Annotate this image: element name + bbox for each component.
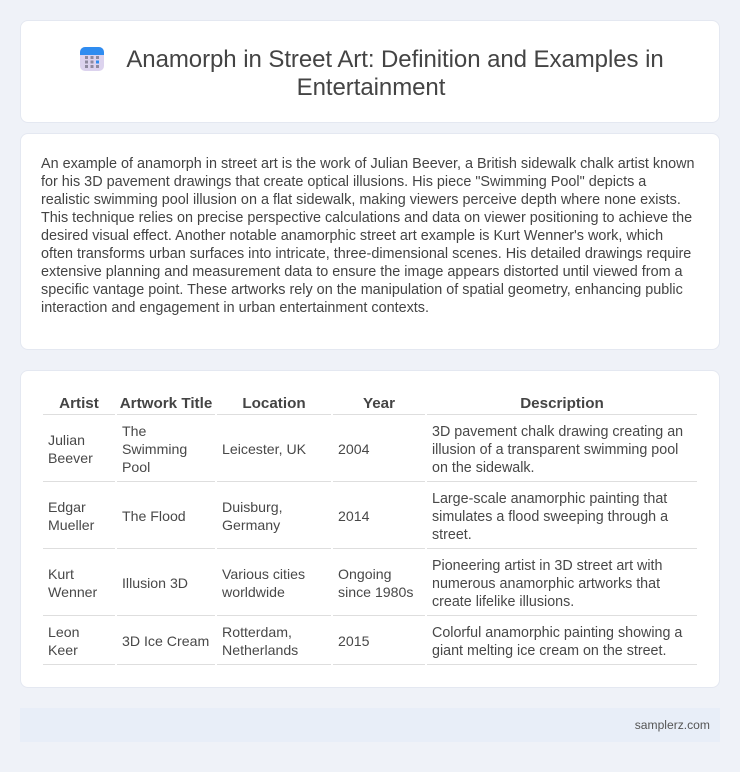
table header: Artist	[59, 395, 99, 412]
table row: Leon Keer: Keer	[48, 642, 78, 658]
table row: Edgar Mueller: street.	[432, 527, 472, 543]
table row: Leon Keer: Rotterdam,	[222, 624, 292, 640]
table row: Edgar Mueller: Germany	[222, 517, 280, 533]
table row: Leon Keer: 3D Ice Cream	[122, 633, 209, 649]
text block: intro: interaction and engagement in urban entertainment contexts.	[41, 300, 429, 316]
table row: Julian Beever: Leicester, UK	[222, 441, 306, 457]
table row: Kurt Wenner: worldwide	[222, 584, 285, 600]
table row: Kurt Wenner: numerous anamorphic artworks that	[432, 576, 660, 592]
table row: Julian Beever: 3D pavement chalk drawing creating an	[432, 424, 683, 440]
table row: Edgar Mueller: Duisburg,	[222, 499, 283, 515]
table row: Edgar Mueller: 2014	[338, 508, 369, 524]
panel: title card	[20, 20, 720, 123]
table header: Description	[520, 395, 604, 412]
table row: Kurt Wenner: since 1980s	[338, 584, 413, 600]
panel: artworks table	[20, 370, 720, 688]
table row: Kurt Wenner	[48, 558, 662, 610]
table row: Kurt Wenner: Wenner	[48, 584, 97, 600]
table row: Kurt Wenner: Pioneering artist in 3D street art with	[432, 558, 662, 574]
table row: Julian Beever: Julian	[48, 432, 85, 448]
table row: Julian Beever: Swimming	[122, 441, 187, 457]
table row: Julian Beever: Beever	[48, 450, 93, 466]
table row: Edgar Mueller	[48, 491, 668, 543]
icon: calendar	[80, 47, 104, 71]
text block: intro: extensive planning and measurement data to ensure the image appears distorted until viewed from a	[41, 264, 683, 280]
table row: Kurt Wenner: Illusion 3D	[122, 575, 188, 591]
table row: Julian Beever: 2004	[338, 441, 369, 457]
text block: intro: An example of anamorph in street art is the work of Julian Beever, a British sidewalk chalk artist known	[41, 156, 694, 172]
table row: Julian Beever	[48, 423, 683, 476]
table row: Leon Keer: Netherlands	[222, 642, 298, 658]
text block: intro: desired visual effect. Another notable anamorphic street art example is Kurt Wenner's work, which	[41, 228, 663, 244]
text block: intro: This technique relies on precise perspective calculations and data on viewer positioning to achieve the	[41, 210, 692, 226]
table row: Edgar Mueller: Mueller	[48, 517, 94, 533]
table row: Julian Beever: The	[122, 423, 146, 439]
table row: Edgar Mueller: The Flood	[122, 508, 186, 524]
table row: Edgar Mueller: Edgar	[48, 499, 86, 515]
table header: Year	[363, 395, 395, 412]
table row: Edgar Mueller: Large-scale anamorphic painting that	[432, 491, 667, 507]
text block: intro: for his 3D pavement drawings that create optical illusions. His piece "Swimming Pool" depicts a	[41, 174, 646, 190]
table row: Julian Beever: on the sidewalk.	[432, 460, 535, 476]
table row: Leon Keer: Colorful anamorphic painting showing a	[432, 625, 682, 641]
footer text: samplerz.com	[635, 718, 710, 732]
title	[126, 46, 664, 101]
table row: Kurt Wenner: Kurt	[48, 566, 74, 582]
text block: intro: realistic swimming pool illusion on a flat sidewalk, making viewers perceive depth where none exists.	[41, 192, 681, 208]
table row: Leon Keer: 2015	[338, 633, 369, 649]
table header	[59, 395, 604, 412]
table row: Kurt Wenner: Various cities	[222, 566, 305, 582]
title: Anamorph in Street Art: Definition and Examples in	[126, 46, 664, 73]
text block: intro: often transforms urban surfaces into intricate, three-dimensional scenes. His detailed drawings require	[41, 246, 691, 262]
table row: Kurt Wenner: create lifelike illusions.	[432, 594, 574, 610]
text block: intro	[41, 156, 694, 316]
table header: Artwork Title	[120, 395, 212, 412]
table row: Julian Beever: illusion of a transparent swimming pool	[432, 442, 678, 458]
title: Entertainment	[297, 74, 445, 101]
table header: Location	[242, 395, 306, 412]
table row: Edgar Mueller: simulates a flood sweeping through a	[432, 509, 668, 525]
table row: Leon Keer: Leon	[48, 624, 79, 640]
footer bar	[20, 708, 720, 742]
text block: intro: specific vantage point. These artworks rely on the manipulation of spatial geometry, enhancing public	[41, 282, 683, 298]
table row: Leon Keer: giant melting ice cream on the street.	[432, 643, 666, 659]
table row: Kurt Wenner: Ongoing	[338, 566, 391, 582]
table row: Julian Beever: Pool	[122, 459, 150, 475]
table row: Leon Keer	[48, 624, 682, 659]
panel: intro paragraph	[20, 133, 720, 350]
